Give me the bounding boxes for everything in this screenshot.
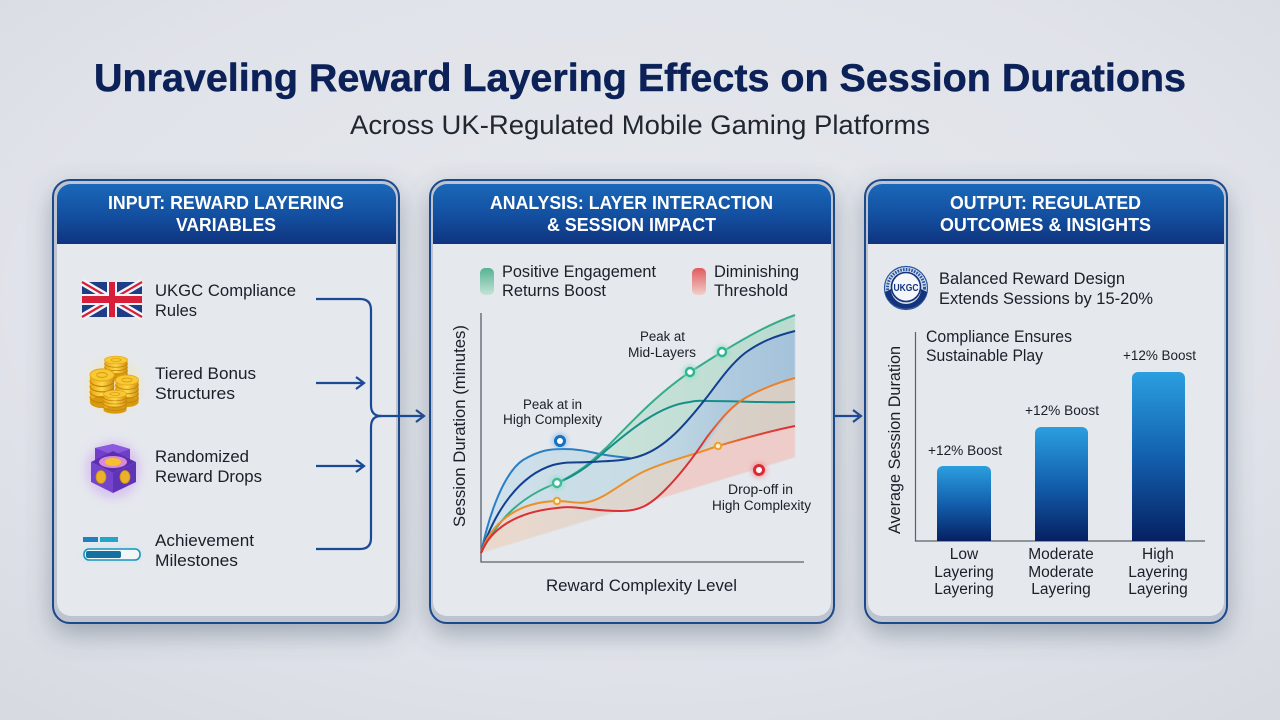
curve: top green: [481, 315, 795, 553]
bar: low: Low: [950, 546, 979, 563]
bar: low: Layering: [934, 581, 994, 598]
icon: UKGC seal: UKGC: [894, 282, 919, 294]
subtitle: Across UK-Regulated Mobile Gaming Platforms: [350, 110, 930, 140]
insight: balanced reward design: [939, 269, 1153, 308]
chart area fills: [481, 315, 795, 553]
panel header: input: [57, 184, 396, 244]
bar chart: average session duration: [886, 327, 1205, 598]
legend: positive engagement: Positive Engagement: [502, 262, 656, 281]
icon: UKGC seal: [884, 266, 928, 310]
bar: moderate: Layering: [1031, 581, 1091, 598]
arrow: analysis to output: [835, 410, 861, 422]
legend: positive engagement: [480, 262, 656, 300]
y axis label: Session Duration (minutes): [451, 325, 469, 527]
y axis label: Average Session Duration: [886, 346, 904, 534]
annotation: peak mid-layers: Peak at: [640, 329, 685, 344]
bar: moderate: +12% Boost: [1025, 402, 1099, 418]
label: randomized reward drops: Randomized: [155, 447, 249, 466]
x axis label: Reward Complexity Level: [546, 577, 737, 595]
panel header: input: INPUT: REWARD LAYERING: [108, 192, 344, 213]
bar: low: +12% Boost: [928, 442, 1002, 458]
curve: teal plateau: [557, 401, 795, 483]
curve: red to orange: [481, 378, 795, 553]
label: UKGC compliance rules: Rules: [155, 301, 197, 320]
label: tiered bonus structures: Tiered Bonus: [155, 364, 256, 383]
annotation: peak high complexity: High Complexity: [503, 412, 602, 427]
note: compliance: Sustainable Play: [926, 346, 1043, 365]
label: achievement milestones: Achievement: [155, 531, 254, 550]
panel header: analysis: ANALYSIS: LAYER INTERACTION: [490, 192, 773, 213]
legend: positive engagement: Returns Boost: [502, 281, 606, 300]
panel: analysis: [430, 180, 861, 623]
axes: [916, 332, 1205, 541]
panel header: output: OUTPUT: REGULATED: [950, 192, 1141, 213]
line chart: session duration vs reward complexity: [451, 313, 811, 595]
curve: navy: [481, 331, 795, 553]
curve: light blue: [481, 449, 630, 553]
panel: output: [865, 180, 1227, 623]
annotation: drop-off: Drop-off in: [728, 482, 793, 497]
annotation: peak mid-layers: [628, 329, 696, 360]
label: achievement milestones: [155, 531, 254, 570]
bar: moderate: [1025, 402, 1099, 598]
insight: balanced reward design: Balanced Reward Design: [939, 269, 1125, 288]
annotation: drop-off: [712, 482, 811, 513]
icon: mystery reward box: [86, 442, 140, 498]
bar: low: Layering: [934, 564, 994, 581]
bar: high: Layering: [1128, 581, 1188, 598]
label: tiered bonus structures: [155, 364, 256, 403]
panel header: output: OUTCOMES & INSIGHTS: [940, 214, 1151, 235]
legend: diminishing threshold: Threshold: [714, 281, 788, 300]
bar: moderate: Moderate: [1028, 564, 1094, 581]
panel header: analysis: [433, 184, 831, 244]
label: tiered bonus structures: Structures: [155, 384, 235, 403]
insight: balanced reward design: Extends Sessions by 15-20%: [939, 289, 1153, 308]
arrows: inputs converging: [316, 299, 424, 549]
annotation: peak mid-layers: Mid-Layers: [628, 345, 696, 360]
label: randomized reward drops: [155, 447, 262, 486]
axes: [481, 313, 804, 562]
legend: diminishing threshold: Diminishing: [714, 262, 799, 281]
legend: diminishing threshold: [692, 262, 799, 300]
icon: UK flag: [82, 282, 142, 317]
note: compliance: Compliance Ensures: [926, 327, 1072, 346]
panel header: output: [868, 184, 1224, 244]
annotation: drop-off: High Complexity: [712, 498, 811, 513]
bar: high: Layering: [1128, 564, 1188, 581]
icon: milestone progress bar: [83, 537, 141, 560]
bar: high: High: [1142, 546, 1174, 563]
label: UKGC compliance rules: [155, 281, 296, 320]
label: UKGC compliance rules: UKGC Compliance: [155, 281, 296, 300]
curve: orange to red: [481, 426, 795, 553]
label: randomized reward drops: Reward Drops: [155, 467, 262, 486]
annotation: peak high complexity: Peak at in: [523, 397, 582, 412]
bar: moderate: Moderate: [1028, 546, 1094, 563]
panel: input: [53, 180, 424, 623]
note: compliance: [926, 327, 1072, 365]
bar: high: [1123, 347, 1196, 598]
panel header: analysis: & SESSION IMPACT: [547, 214, 717, 235]
annotation: peak high complexity: [503, 397, 602, 427]
panel header: input: VARIABLES: [176, 214, 276, 235]
bar: high: +12% Boost: [1123, 347, 1196, 363]
title: Unraveling Reward Layering Effects on Session Durations: [94, 57, 1186, 100]
markers: [550, 345, 767, 504]
icon: coin stacks: [88, 356, 140, 414]
label: achievement milestones: Milestones: [155, 551, 238, 570]
bar: low: [928, 442, 1002, 598]
